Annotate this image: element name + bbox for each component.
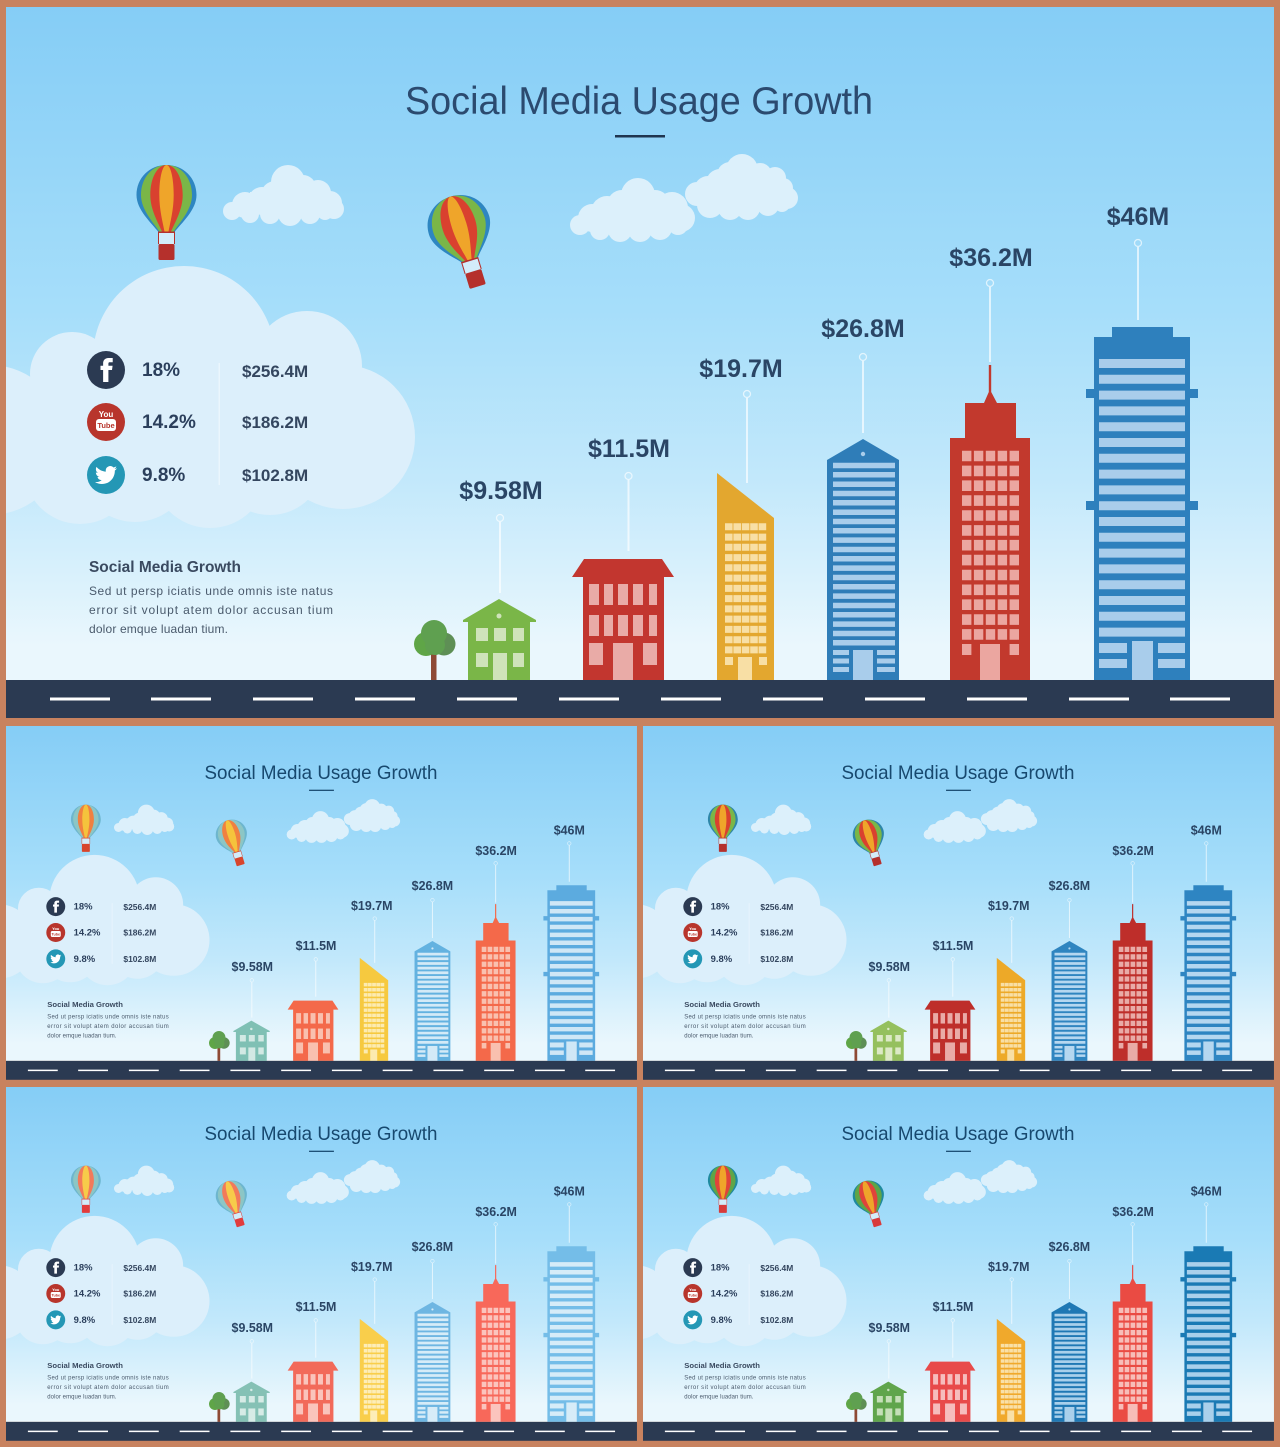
building: blue skyscraper bbox=[543, 1246, 599, 1422]
building: yellow tower bbox=[997, 958, 1025, 1061]
stat row: Twitter bbox=[46, 1310, 156, 1329]
building: blue tower bbox=[415, 941, 450, 1061]
stat row: Facebook: $256.4M bbox=[123, 902, 156, 912]
title underline bbox=[309, 1151, 334, 1152]
callout: $46M bbox=[1107, 203, 1169, 320]
callout: $26.8M bbox=[412, 1240, 453, 1299]
callout: $19.7M: $19.7M bbox=[699, 355, 783, 383]
callout: $46M: $46M bbox=[1191, 823, 1222, 837]
stat row: Twitter: $102.8M bbox=[123, 1315, 156, 1325]
icon: Twitter bbox=[87, 456, 125, 494]
stat row: Twitter: $102.8M bbox=[760, 1315, 793, 1325]
stat row: YouTube: $186.2M bbox=[760, 1288, 793, 1298]
icon: balloon tilted bbox=[428, 195, 490, 289]
sky background bbox=[6, 7, 1274, 680]
panel: variant slide top left bbox=[0, 726, 637, 1080]
stat row: Facebook bbox=[683, 897, 793, 916]
callout: $11.5M: $11.5M bbox=[933, 939, 973, 953]
building: yellow tower bbox=[360, 1319, 388, 1422]
icon: balloon tilted bbox=[849, 1177, 893, 1231]
icon: Facebook bbox=[87, 351, 125, 389]
callout: $26.8M: $26.8M bbox=[1049, 879, 1090, 893]
text block body: dolor emque luadan tium. bbox=[89, 622, 228, 636]
callout: $11.5M bbox=[588, 435, 670, 551]
Twitter value: $102.8M bbox=[242, 466, 308, 485]
panel: variant slide bottom left bbox=[0, 1087, 637, 1441]
YouTube value: $186.2M bbox=[242, 413, 308, 432]
sky background bbox=[643, 726, 1274, 1061]
title underline bbox=[309, 790, 334, 791]
callout: $19.7M: $19.7M bbox=[351, 1260, 392, 1274]
text block heading: Social Media Growth bbox=[47, 1361, 123, 1370]
building: yellow tower bbox=[360, 958, 388, 1061]
small cloud bbox=[223, 165, 344, 226]
stat row: YouTube: $186.2M bbox=[760, 927, 793, 937]
stat row: YouTube bbox=[46, 1284, 156, 1303]
callout: $9.58M bbox=[232, 1321, 273, 1379]
small cloud bbox=[751, 1166, 811, 1196]
title underline bbox=[946, 790, 971, 791]
stat row: Facebook: $256.4M bbox=[760, 1263, 793, 1273]
building: blue tower bbox=[827, 439, 899, 680]
road bbox=[6, 680, 1274, 718]
icon: balloon tilted bbox=[849, 816, 893, 870]
building: house bbox=[870, 1382, 907, 1422]
big cloud bbox=[0, 266, 415, 528]
icon: tree bbox=[846, 1392, 867, 1422]
stat row: YouTube: Tube bbox=[688, 932, 697, 936]
stat row: YouTube bbox=[683, 923, 793, 942]
YouTube percent: 14.2% bbox=[142, 412, 196, 433]
stat row: YouTube: You bbox=[689, 1287, 697, 1292]
text block body: error sit volupt atem dolor accusan tium bbox=[47, 1024, 169, 1030]
road bbox=[643, 1422, 1274, 1441]
callout: $46M: $46M bbox=[554, 1184, 585, 1198]
callout: $26.8M: $26.8M bbox=[412, 879, 453, 893]
stat row: YouTube: 14.2% bbox=[711, 927, 738, 938]
text block body bbox=[47, 1376, 169, 1400]
building: blue tower bbox=[1052, 1302, 1087, 1422]
callout: $9.58M: $9.58M bbox=[232, 960, 273, 974]
callout: $36.2M bbox=[475, 1205, 517, 1264]
sky background bbox=[6, 726, 637, 1061]
stat row: YouTube: 14.2% bbox=[74, 927, 101, 938]
icon: YouTube: You bbox=[99, 410, 113, 419]
big cloud bbox=[0, 1216, 210, 1346]
callout: $36.2M bbox=[949, 244, 1033, 362]
icon: balloon left bbox=[71, 805, 101, 852]
callout: $36.2M: $36.2M bbox=[1112, 1205, 1154, 1219]
stat row: Twitter: $102.8M bbox=[760, 954, 793, 964]
stat row: Twitter bbox=[683, 949, 793, 968]
stat row: YouTube: 14.2% bbox=[711, 1288, 738, 1299]
callout: $11.5M bbox=[296, 939, 336, 997]
callout: $46M: $46M bbox=[1107, 203, 1169, 231]
callout: $26.8M bbox=[1049, 1240, 1090, 1299]
title: Social Media Usage Growth bbox=[842, 1123, 1074, 1145]
text block body: error sit volupt atem dolor accusan tium bbox=[89, 603, 333, 617]
small cloud bbox=[114, 805, 174, 835]
panel: variant slide bottom right bbox=[598, 1087, 1274, 1441]
callout: $36.2M: $36.2M bbox=[475, 1205, 517, 1219]
callout: $9.58M: $9.58M bbox=[459, 477, 543, 505]
stat row: YouTube bbox=[87, 403, 308, 441]
building: red skyscraper bbox=[950, 365, 1030, 680]
big cloud bbox=[598, 855, 847, 985]
stat row: YouTube: Tube bbox=[51, 932, 60, 936]
text block heading: Social Media Growth bbox=[47, 1000, 123, 1009]
stat row: Twitter: 9.8% bbox=[74, 1315, 96, 1326]
Facebook value: $256.4M bbox=[242, 362, 308, 381]
callout: $26.8M: $26.8M bbox=[821, 315, 905, 343]
text block body: error sit volupt atem dolor accusan tium bbox=[684, 1385, 806, 1391]
stat row: YouTube: $186.2M bbox=[123, 1288, 156, 1298]
title underline bbox=[946, 1151, 971, 1152]
text block heading: Social Media Growth bbox=[684, 1361, 760, 1370]
building: yellow tower bbox=[997, 1319, 1025, 1422]
road bbox=[6, 1422, 637, 1441]
building: blue tower bbox=[1052, 941, 1087, 1061]
building: block bbox=[288, 1001, 338, 1061]
building: block bbox=[288, 1362, 338, 1422]
text block body bbox=[89, 584, 333, 636]
stat row: YouTube bbox=[683, 1284, 793, 1303]
Facebook percent: 18% bbox=[142, 360, 180, 381]
title: Social Media Usage Growth bbox=[205, 1123, 437, 1145]
callout: $36.2M: $36.2M bbox=[949, 244, 1033, 272]
building: block bbox=[925, 1362, 975, 1422]
callout: $36.2M: $36.2M bbox=[475, 844, 517, 858]
callout: $46M: $46M bbox=[1191, 1184, 1222, 1198]
text block body: Sed ut persp iciatis unde omnis iste natus bbox=[47, 1015, 169, 1021]
stat row: YouTube: Tube bbox=[51, 1293, 60, 1297]
building: house bbox=[233, 1021, 270, 1061]
callout: $9.58M bbox=[869, 1321, 910, 1379]
building: house bbox=[463, 599, 536, 680]
building: yellow tower bbox=[717, 473, 774, 680]
callout: $19.7M: $19.7M bbox=[988, 899, 1029, 913]
stat row: YouTube: $186.2M bbox=[123, 927, 156, 937]
building: house bbox=[233, 1382, 270, 1422]
stat row: Twitter: 9.8% bbox=[711, 954, 733, 965]
building: red block bbox=[572, 559, 674, 680]
building: house bbox=[870, 1021, 907, 1061]
icon: balloon left bbox=[71, 1166, 101, 1213]
small cloud bbox=[751, 805, 811, 835]
stat row: Facebook: $256.4M bbox=[760, 902, 793, 912]
road bbox=[6, 1061, 637, 1080]
stat row: Facebook bbox=[46, 897, 156, 916]
callout: $9.58M bbox=[232, 960, 273, 1018]
stat row: Twitter bbox=[46, 949, 156, 968]
callout: $11.5M bbox=[933, 939, 973, 997]
icon: tree bbox=[414, 620, 456, 680]
callout: $46M bbox=[554, 1184, 585, 1243]
callout: $26.8M: $26.8M bbox=[1049, 1240, 1090, 1254]
stat row: Facebook: 18% bbox=[74, 902, 93, 913]
callout: $19.7M: $19.7M bbox=[351, 899, 392, 913]
title: Social Media Usage Growth bbox=[405, 80, 873, 123]
icon: YouTube: Tube bbox=[97, 421, 115, 430]
double cloud bbox=[570, 154, 798, 242]
text block body: dolor emque luadan tium. bbox=[684, 1394, 754, 1400]
title: Social Media Usage Growth bbox=[842, 762, 1074, 784]
stat row: YouTube: 14.2% bbox=[74, 1288, 101, 1299]
callout: $19.7M bbox=[988, 1260, 1029, 1324]
building: skyscraper bbox=[476, 904, 516, 1061]
stat row: Facebook: $256.4M bbox=[123, 1263, 156, 1273]
double cloud bbox=[287, 1160, 400, 1204]
building: skyscraper bbox=[476, 1265, 516, 1422]
text block body: dolor emque luadan tium. bbox=[684, 1033, 754, 1039]
building: block bbox=[925, 1001, 975, 1061]
stat row: YouTube bbox=[46, 923, 156, 942]
stat row: Twitter bbox=[683, 1310, 793, 1329]
callout: $19.7M bbox=[699, 355, 783, 483]
callout: $9.58M bbox=[459, 477, 543, 593]
sky background bbox=[643, 1087, 1274, 1422]
callout: $11.5M: $11.5M bbox=[296, 939, 336, 953]
callout: $19.7M bbox=[988, 899, 1029, 963]
text block body: dolor emque luadan tium. bbox=[47, 1033, 117, 1039]
icon: balloon left bbox=[136, 165, 196, 260]
building: blue skyscraper bbox=[1180, 1246, 1236, 1422]
callout: $46M bbox=[1191, 1184, 1222, 1243]
callout: $11.5M: $11.5M bbox=[933, 1300, 973, 1314]
text block body bbox=[684, 1015, 806, 1039]
icon: balloon left bbox=[708, 1166, 738, 1213]
text block heading: Social Media Growth bbox=[89, 559, 241, 576]
Twitter percent: 9.8% bbox=[142, 465, 185, 486]
text block body: Sed ut persp iciatis unde omnis iste natus bbox=[89, 584, 333, 598]
icon: balloon tilted bbox=[212, 1177, 256, 1231]
callout: $11.5M: $11.5M bbox=[588, 435, 670, 463]
callout: $9.58M: $9.58M bbox=[869, 1321, 910, 1335]
icon: balloon left bbox=[708, 805, 738, 852]
big cloud bbox=[598, 1216, 847, 1346]
callout: $11.5M bbox=[933, 1300, 973, 1358]
icon: balloon tilted bbox=[212, 816, 256, 870]
callout: $36.2M bbox=[475, 844, 517, 903]
stat row: YouTube: Tube bbox=[688, 1293, 697, 1297]
building: skyscraper bbox=[1113, 1265, 1153, 1422]
stat row: Facebook: 18% bbox=[711, 902, 730, 913]
stat row: Twitter: $102.8M bbox=[123, 954, 156, 964]
building: blue skyscraper bbox=[1180, 885, 1236, 1061]
double cloud bbox=[287, 799, 400, 843]
text block heading: Social Media Growth bbox=[684, 1000, 760, 1009]
text block body bbox=[684, 1376, 806, 1400]
stat row: Twitter: 9.8% bbox=[74, 954, 96, 965]
icon: tree bbox=[209, 1392, 230, 1422]
small cloud bbox=[114, 1166, 174, 1196]
callout: $26.8M: $26.8M bbox=[412, 1240, 453, 1254]
callout: $36.2M bbox=[1112, 844, 1154, 903]
callout: $11.5M: $11.5M bbox=[296, 1300, 336, 1314]
sky background bbox=[6, 1087, 637, 1422]
text block body: Sed ut persp iciatis unde omnis iste natus bbox=[47, 1376, 169, 1382]
icon: tree bbox=[209, 1031, 230, 1061]
double cloud bbox=[924, 1160, 1037, 1204]
big cloud bbox=[0, 855, 210, 985]
stat row: Facebook: 18% bbox=[711, 1263, 730, 1274]
double cloud bbox=[924, 799, 1037, 843]
building: blue tower bbox=[415, 1302, 450, 1422]
callout: $46M: $46M bbox=[554, 823, 585, 837]
callout: $9.58M: $9.58M bbox=[869, 960, 910, 974]
text block body: Sed ut persp iciatis unde omnis iste natus bbox=[684, 1015, 806, 1021]
text block body: dolor emque luadan tium. bbox=[47, 1394, 117, 1400]
text block body: error sit volupt atem dolor accusan tium bbox=[47, 1385, 169, 1391]
stat row: Facebook bbox=[46, 1258, 156, 1277]
stat row: Facebook: 18% bbox=[74, 1263, 93, 1274]
callout: $19.7M bbox=[351, 899, 392, 963]
stat row: Twitter bbox=[87, 456, 308, 494]
callout: $26.8M bbox=[412, 879, 453, 938]
callout: $46M bbox=[1191, 823, 1222, 882]
callout: $9.58M: $9.58M bbox=[232, 1321, 273, 1335]
callout: $19.7M bbox=[351, 1260, 392, 1324]
callout: $26.8M bbox=[821, 315, 905, 433]
callout: $36.2M: $36.2M bbox=[1112, 844, 1154, 858]
text block body: error sit volupt atem dolor accusan tium bbox=[684, 1024, 806, 1030]
stat row: YouTube: You bbox=[689, 926, 697, 931]
stat row: YouTube: You bbox=[52, 1287, 60, 1292]
stat row: Facebook bbox=[683, 1258, 793, 1277]
callout: $11.5M bbox=[296, 1300, 336, 1358]
building: blue skyscraper bbox=[1086, 327, 1198, 680]
building: skyscraper bbox=[1113, 904, 1153, 1061]
callout: $9.58M bbox=[869, 960, 910, 1018]
icon: tree bbox=[846, 1031, 867, 1061]
callout: $19.7M: $19.7M bbox=[988, 1260, 1029, 1274]
callout: $46M bbox=[554, 823, 585, 882]
panel: variant slide top right bbox=[598, 726, 1274, 1080]
title: Social Media Usage Growth bbox=[205, 762, 437, 784]
panel: main slide bbox=[0, 7, 1274, 718]
text block body: Sed ut persp iciatis unde omnis iste natus bbox=[684, 1376, 806, 1382]
icon: YouTube bbox=[87, 403, 125, 441]
callout: $26.8M bbox=[1049, 879, 1090, 938]
callout: $36.2M bbox=[1112, 1205, 1154, 1264]
stat row: Facebook bbox=[87, 351, 308, 389]
stat row: Twitter: 9.8% bbox=[711, 1315, 733, 1326]
title underline bbox=[615, 135, 665, 138]
text block body bbox=[47, 1015, 169, 1039]
building: blue skyscraper bbox=[543, 885, 599, 1061]
road bbox=[643, 1061, 1274, 1080]
stat row: YouTube: You bbox=[52, 926, 60, 931]
